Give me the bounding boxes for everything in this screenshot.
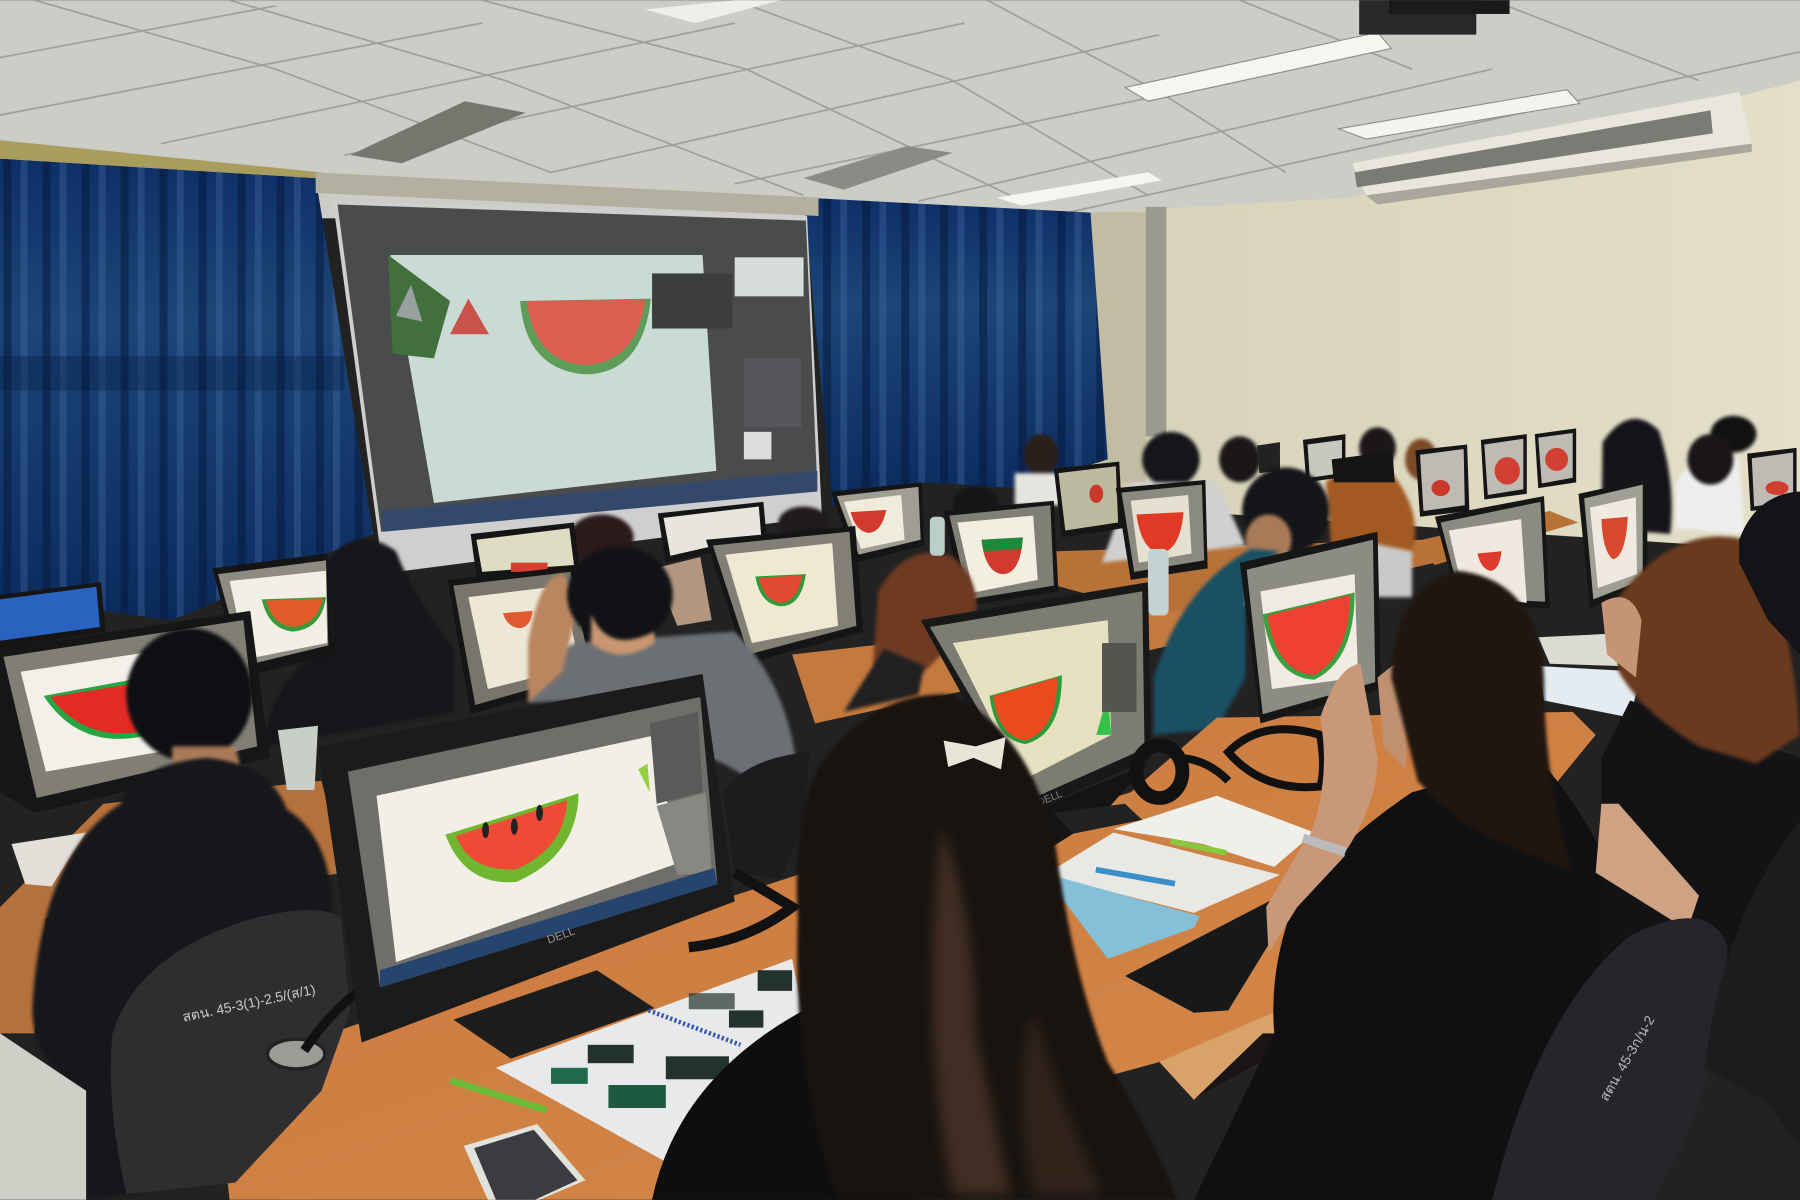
projection screen bbox=[316, 172, 822, 574]
student in gray shirt bbox=[528, 547, 798, 804]
projected green shape bbox=[388, 255, 450, 358]
smartphone bbox=[464, 1124, 585, 1200]
monitor: small left of student bbox=[448, 566, 597, 714]
notebook and papers bbox=[1042, 796, 1314, 959]
chair behind gray student bbox=[723, 752, 809, 878]
handbag bbox=[654, 557, 712, 626]
monitor: centre large bbox=[921, 582, 1151, 813]
watermelon bbox=[990, 675, 1062, 744]
keyboard bbox=[1125, 896, 1291, 1013]
plastic cup bbox=[278, 726, 318, 790]
monitor: left row small bbox=[0, 554, 333, 677]
ceiling lights bbox=[350, 0, 1580, 206]
green pen bbox=[450, 1080, 546, 1110]
hair clip bbox=[944, 737, 1006, 769]
woman at far right edge bbox=[1739, 492, 1800, 655]
curtain left bbox=[0, 159, 373, 620]
headphones bbox=[689, 729, 1323, 947]
projector bbox=[1359, 0, 1510, 35]
monitor row back bbox=[471, 428, 1797, 606]
chair far right bbox=[1705, 821, 1800, 1148]
student in hoodie bbox=[32, 628, 344, 1200]
woman with auburn hair right bbox=[1596, 537, 1800, 1148]
back wall bbox=[1091, 81, 1800, 551]
ceiling strip behind curtain bbox=[0, 140, 321, 178]
right desk papers bbox=[1538, 634, 1642, 718]
monitor: rear blank bbox=[471, 502, 767, 576]
rear desks bbox=[792, 511, 1578, 723]
ceiling bbox=[0, 0, 1800, 218]
student at left middle bbox=[264, 539, 453, 746]
monitor: center row bbox=[831, 482, 924, 563]
left desk bbox=[0, 781, 344, 1033]
monitor: centre large: DELL bbox=[1036, 789, 1064, 809]
chair left foreground: สตน. 45-3(1)-2.5/(ส/1) bbox=[181, 982, 317, 1025]
monitor: foreground bbox=[318, 674, 735, 1043]
front desk bbox=[216, 712, 1596, 1200]
monitor stand bbox=[453, 970, 654, 1059]
student with auburn hair bbox=[844, 553, 977, 712]
air conditioner bbox=[1352, 92, 1752, 205]
student in teal jacket bbox=[1154, 467, 1329, 735]
water bottles bbox=[930, 517, 1169, 615]
monitor stand centre bbox=[1027, 764, 1148, 855]
chair right foreground: สตน. 45-3ก/น-2 bbox=[1597, 1013, 1658, 1104]
woman covering mouth bbox=[1194, 571, 1619, 1200]
projected triangle bbox=[450, 299, 489, 334]
projected tool panel bbox=[652, 273, 732, 329]
chair right foreground bbox=[1492, 918, 1728, 1200]
presenter bbox=[1024, 434, 1058, 475]
projected watermelon bbox=[520, 299, 651, 374]
monitor: right rear bbox=[1435, 479, 1647, 609]
monitor: foreground: DELL bbox=[546, 926, 577, 947]
monitor: right large bbox=[1240, 532, 1381, 723]
monitor: left large bbox=[0, 611, 270, 813]
monitor: screen with red fruit bbox=[1116, 480, 1208, 580]
curtain right bbox=[804, 198, 1108, 505]
monitor: screen with green rind fruit bbox=[944, 501, 1058, 606]
watermelon bbox=[445, 793, 579, 882]
cable grommet bbox=[267, 1039, 325, 1069]
monitor: centre with watermelon bbox=[706, 526, 863, 664]
monitor back row bbox=[1054, 428, 1797, 537]
floor bbox=[0, 1033, 86, 1200]
woman with long hair foreground bbox=[652, 694, 1177, 1200]
printed worksheet bbox=[496, 959, 804, 1162]
chair left foreground bbox=[111, 910, 350, 1194]
rear students bbox=[569, 416, 1800, 655]
